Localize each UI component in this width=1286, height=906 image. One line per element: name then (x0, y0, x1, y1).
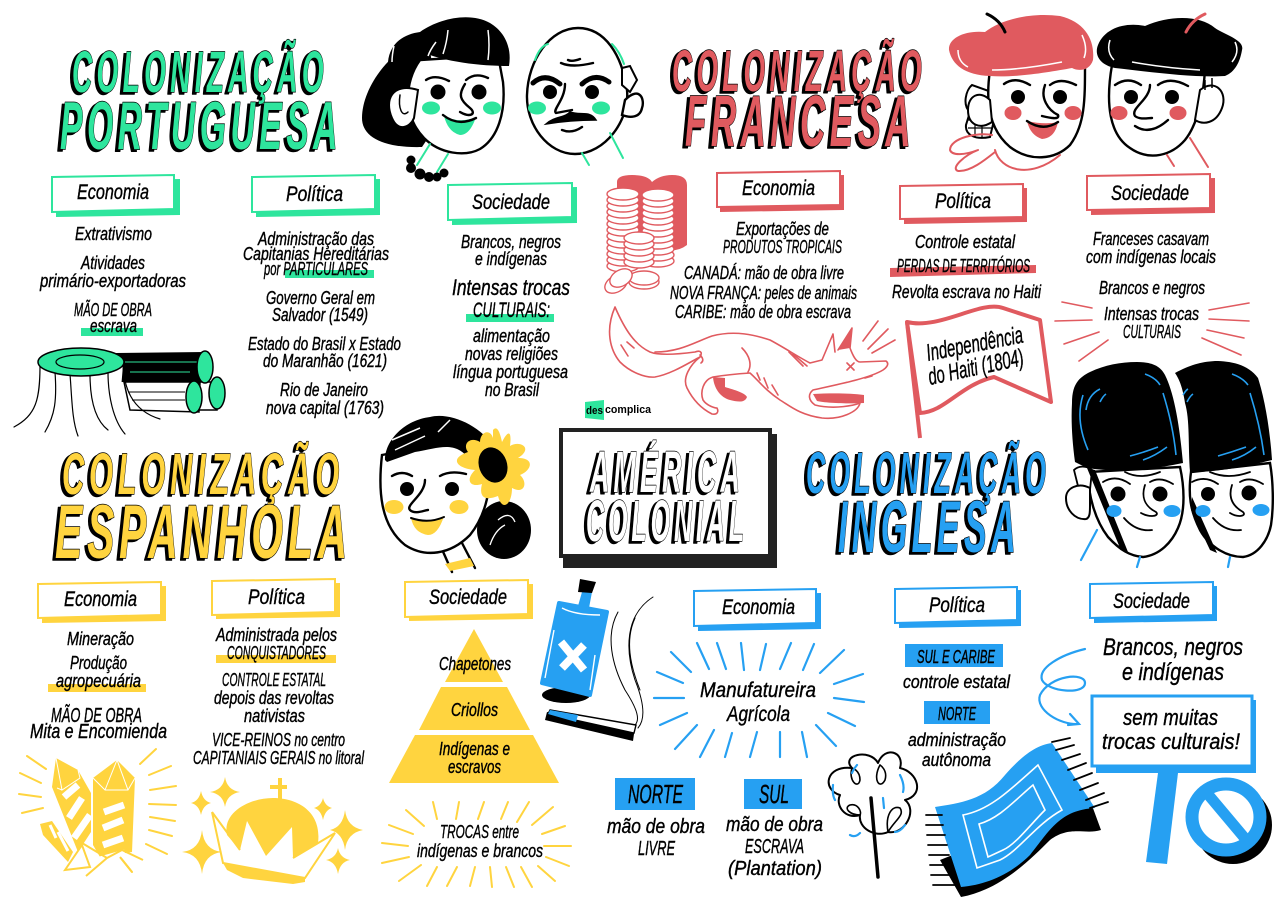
title: colonização inglesa: INGLESA (838, 487, 1020, 568)
box: política: Política (935, 190, 991, 213)
icon: portuguese man (527, 28, 643, 165)
label: sul (726, 779, 823, 880)
text: sociedade: e indígenas (1122, 659, 1224, 686)
text: economia (39, 224, 186, 336)
text: economia: primário-exportadoras (39, 271, 186, 291)
logo: descomplica (585, 400, 652, 420)
icon: sign no (1092, 696, 1272, 864)
icon: crystals (19, 749, 176, 876)
label: norte (607, 778, 705, 860)
text: economia: Mineração (67, 629, 134, 649)
box: sociedade: Sociedade (1113, 590, 1190, 613)
panel: colonização inglesa (542, 361, 1273, 897)
icon: tree stump and logs (14, 348, 225, 436)
pyramid: sociedade: Chapetones (439, 654, 511, 674)
icon: flag independência do haiti: Independência (924, 322, 1025, 367)
panel: colonização portuguesa (14, 17, 643, 436)
text: sociedade: novas religiões (465, 344, 558, 364)
box: sociedade: Sociedade (429, 586, 507, 609)
text: sociedade: alimentação (473, 326, 550, 346)
box: política: Política (929, 594, 985, 617)
title: colonização francesa (672, 39, 926, 162)
text: política: administração (908, 730, 1006, 750)
text: sociedade: CULTURAIS: (473, 299, 550, 322)
text: economia: NOVA FRANÇA: peles de animais (670, 283, 857, 303)
text: economia: MÃO DE OBRA (74, 299, 152, 320)
text: política: por PARTICULARES (263, 259, 368, 279)
text: política: Governo Geral em (266, 288, 375, 308)
text: sociedade (452, 232, 570, 400)
label: norte: NORTE (628, 779, 683, 809)
text: economia: escrava (90, 316, 137, 336)
panel: colonização francesa: COLONIZAÇÃO (672, 39, 926, 104)
text: política: PERDAS DE TERRITÓRIOS (897, 255, 1030, 276)
text: sociedade: Brancos, negros (461, 232, 561, 252)
box: economia: Economia (64, 588, 137, 611)
logo: descomplica: complica (605, 404, 652, 416)
panel: título américa colonial (561, 430, 777, 568)
text: política: Capitanias Hereditárias (243, 244, 389, 264)
text: economia (670, 219, 857, 322)
panel: colonização francesa (602, 14, 1249, 438)
text: política (890, 232, 1042, 302)
text: política: Revolta escrava no Haiti (892, 282, 1042, 302)
callout: manufatureira agrícola: Manufatureira (700, 679, 816, 702)
text: política (903, 644, 1011, 770)
text: economia (30, 629, 167, 743)
text: política: depois das revoltas (214, 688, 334, 708)
text: política: autônoma (922, 750, 991, 770)
box: economia (717, 171, 844, 212)
callout: trocas: indígenas e brancos (417, 841, 543, 861)
callout: trocas: TROCAS entre (440, 822, 519, 842)
text: política: CAPITANIAIS GERAIS no litoral (193, 748, 365, 768)
icon: stacks of coins (602, 175, 687, 297)
text: economia: Atividades (80, 253, 145, 273)
pyramid: sociedade: Criollos (451, 700, 498, 720)
text: sociedade: com indígenas locais (1086, 247, 1216, 267)
text: economia: Exportações de (736, 219, 829, 239)
text: economia: CANADÁ: mão de obra livre (684, 263, 844, 283)
label: sul: mão de obra (726, 814, 823, 836)
label: sul: SUL (759, 779, 789, 809)
panel: título américa colonial: AMÉRICA (589, 440, 744, 505)
icon: french woman (949, 14, 1093, 171)
text: sociedade (1086, 229, 1216, 342)
label: sul: (Plantation) (728, 858, 822, 880)
title: colonização francesa: FRANCESA (685, 82, 915, 162)
box: sociedade (405, 580, 533, 621)
box: sociedade (1087, 174, 1215, 215)
text: sociedade: Intensas trocas (1104, 304, 1199, 324)
icon: spanish woman (380, 416, 531, 572)
text: sociedade: Intensas trocas (452, 275, 570, 300)
text: política: CONTROLE ESTATAL (222, 670, 326, 690)
text: política (243, 229, 401, 418)
icon: flag independência do haiti (907, 307, 1051, 438)
text: economia: agropecuária (56, 671, 141, 691)
panel: colonização espanhola (19, 416, 571, 887)
box: política: Política (248, 586, 305, 609)
callout: trocas (382, 802, 571, 887)
pyramid: sociedade: escravos (448, 757, 501, 777)
text: economia: Extrativismo (75, 224, 152, 244)
callout: manufatureira agrícola (654, 643, 864, 757)
box: economia: Economia (722, 596, 795, 619)
icon: crown (182, 777, 363, 884)
text: sociedade: Brancos e negros (1099, 278, 1205, 298)
icon: sign no: trocas culturais! (1102, 729, 1240, 754)
callout: manufatureira agrícola: Agrícola (725, 703, 790, 726)
icon: rug (926, 738, 1108, 897)
icon: french man (1097, 14, 1242, 167)
panel: título américa colonial: COLONIAL (586, 489, 748, 554)
text: sociedade: língua portuguesa (453, 362, 568, 382)
text: política: Estado do Brasil x Estado (248, 334, 401, 354)
box: economia: Economia (742, 177, 815, 200)
text: política: Rio de Janeiro (280, 380, 368, 400)
text: sociedade: e indígenas (475, 249, 547, 269)
text: política: SUL E CARIBE (917, 647, 996, 667)
rays: sociedade francesa (1055, 302, 1249, 361)
title: colonização espanhola (55, 442, 352, 575)
text: sociedade: Franceses casavam (1093, 229, 1209, 249)
title: colonização espanhola: COLONIZAÇÃO (62, 442, 344, 507)
text: política: nova capital (1763) (266, 398, 384, 418)
text: política: CONQUISTADORES (227, 643, 326, 663)
box: política (212, 579, 340, 619)
box: economia (38, 582, 166, 623)
box: economia (694, 589, 821, 631)
box: sociedade (448, 183, 577, 225)
label: norte: mão de obra (607, 816, 705, 838)
text: política: do Maranhão (1621) (263, 351, 387, 371)
text: política: Salvador (1549) (272, 305, 368, 325)
box: política: Política (286, 183, 343, 206)
text: economia: PRODUTOS TROPICAIS (723, 237, 842, 257)
text: política (193, 625, 365, 768)
text: economia: Produção (70, 653, 127, 673)
panel: colonização portuguesa: PORTUGUESA (60, 88, 342, 164)
text: economia: MÃO DE OBRA (51, 703, 142, 727)
icon: sign no: sem muitas (1123, 705, 1218, 730)
icon: fox (610, 307, 895, 418)
logo: descomplica: des (586, 405, 603, 417)
text: sociedade: Brancos, negros (1103, 634, 1243, 661)
arrow: swirl (1039, 649, 1085, 725)
text: política: Administração das (257, 229, 374, 249)
text: política: NORTE (938, 704, 977, 724)
text: economia: Mita e Encomienda (30, 721, 167, 743)
text: política: Administrada pelos (215, 625, 337, 645)
icon: cotton plant (829, 752, 917, 877)
icon: flag independência do haiti: do Haiti (1804) (926, 344, 1026, 391)
title: colonização portuguesa: COLONIZAÇÃO (72, 40, 328, 105)
box: sociedade (1090, 582, 1217, 623)
title: colonização inglesa (806, 441, 1050, 568)
icon: english guards (1066, 361, 1273, 567)
text: sociedade: CULTURAIS (1123, 322, 1181, 342)
box: política (900, 184, 1027, 224)
text: economia: CARIBE: mão de obra escrava (675, 302, 851, 322)
text: política: nativistas (244, 706, 305, 726)
box: economia (52, 175, 180, 217)
text: sociedade (1103, 634, 1243, 686)
text: política: Controle estatal (915, 232, 1016, 252)
pyramid: sociedade (389, 629, 559, 783)
label: norte: LIVRE (638, 838, 675, 860)
icon: portuguese woman (362, 17, 510, 182)
box: política (252, 175, 380, 217)
label: sul: ESCRAVA (745, 836, 804, 858)
text: sociedade: no Brasil (485, 380, 540, 400)
text: política: VICE-REINOS no centro (212, 730, 345, 750)
box: política (895, 587, 1021, 628)
text: política: controle estatal (903, 672, 1011, 692)
box: economia: Economia (77, 181, 149, 204)
icon: bottle and cigarette (542, 579, 653, 741)
title: colonização portuguesa (60, 40, 342, 164)
pyramid: sociedade: Indígenas e (439, 739, 510, 759)
box: sociedade: Sociedade (1111, 182, 1189, 205)
box: sociedade: Sociedade (472, 191, 550, 214)
title: colonização espanhola: ESPANHOLA (55, 490, 352, 575)
